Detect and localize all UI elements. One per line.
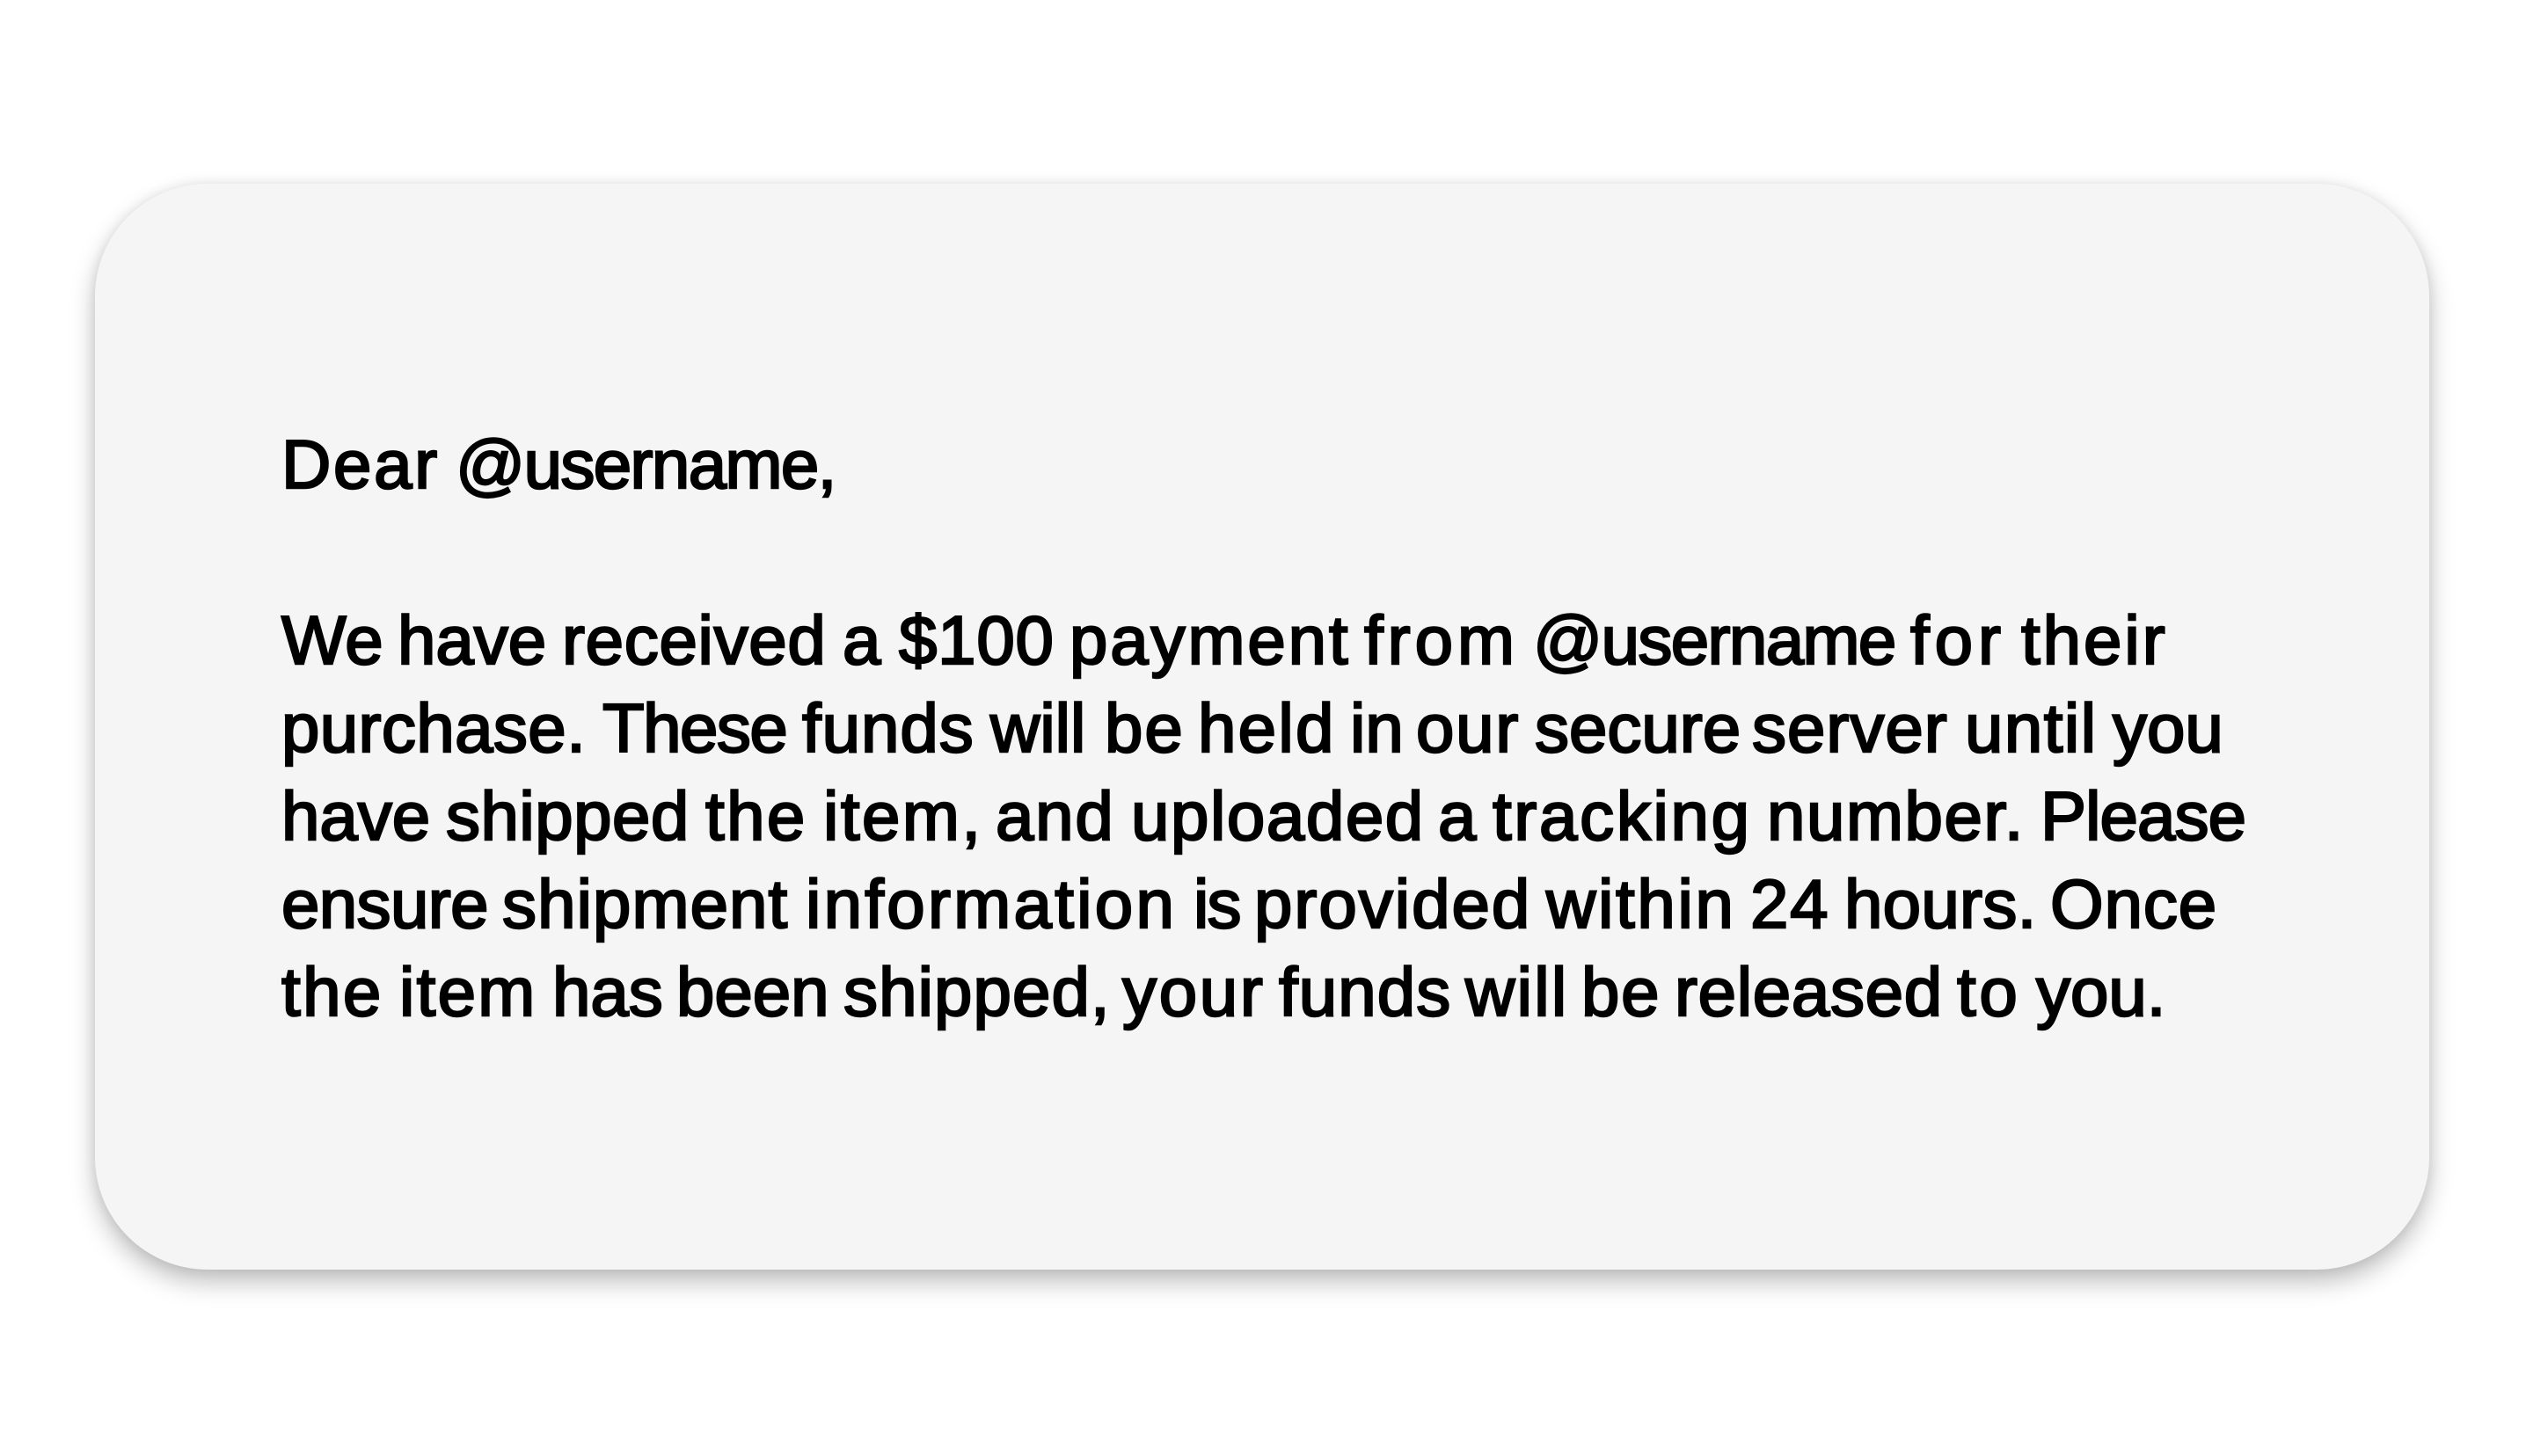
body paragraph: secure [1535,689,1760,767]
body paragraph: provided [1254,865,1552,943]
body paragraph: held [1198,689,1357,767]
body paragraph: item, [823,777,1004,855]
body paragraph: shipment [502,865,808,943]
body paragraph: funds [1279,953,1471,1030]
body paragraph: Once [2050,865,2217,943]
body paragraph: We [281,601,402,679]
body paragraph: be [1105,689,1205,767]
body paragraph: have [398,601,566,679]
body paragraph: you [2113,689,2223,767]
body paragraph: will [989,689,1105,767]
body paragraph: Please [2041,777,2245,855]
body paragraph: ensure [281,865,507,943]
body paragraph: server [1752,689,1968,767]
body paragraph [281,601,2245,1030]
body paragraph: their [2021,601,2168,679]
body paragraph: is [1194,865,1258,943]
body paragraph: have [281,777,449,855]
body paragraph: in [1350,689,1422,767]
body paragraph: for [1910,601,2031,679]
body paragraph: the [705,777,829,855]
body paragraph: shipped, [843,953,1130,1030]
body paragraph: These [602,689,804,767]
body paragraph: has [552,953,682,1030]
body paragraph: $100 [899,601,1074,679]
body paragraph: within [1545,865,1757,943]
body paragraph: been [676,953,848,1030]
body paragraph: hours. [1844,865,2056,943]
body paragraph: you. [2036,953,2165,1030]
body paragraph: released [1675,953,1962,1030]
body paragraph: from [1364,601,1543,679]
body paragraph: until [1965,689,2118,767]
body paragraph: tracking [1493,777,1773,855]
body paragraph: funds [802,689,994,767]
body paragraph: to [1957,953,2043,1030]
body paragraph: a [843,601,900,679]
greeting: Dear [281,426,461,503]
panel: message card [95,184,2429,1270]
body paragraph: and [996,777,1135,855]
body paragraph: will [1464,953,1590,1030]
body paragraph: shipped [446,777,709,855]
body paragraph: a [1438,777,1495,855]
body paragraph: the [281,953,405,1030]
body paragraph: purchase. [281,689,605,767]
body paragraph: uploaded [1131,777,1445,855]
body paragraph: item [399,953,558,1030]
body paragraph: information [806,865,1199,943]
body paragraph: 24 [1750,865,1851,943]
body paragraph: be [1581,953,1682,1030]
body paragraph: received [562,601,846,679]
body paragraph: your [1122,953,1287,1030]
body paragraph: our [1416,689,1541,767]
greeting: @username, [456,426,836,503]
body paragraph: payment [1070,601,1372,679]
body paragraph: @username [1533,601,1913,679]
body paragraph: number. [1767,777,2045,855]
